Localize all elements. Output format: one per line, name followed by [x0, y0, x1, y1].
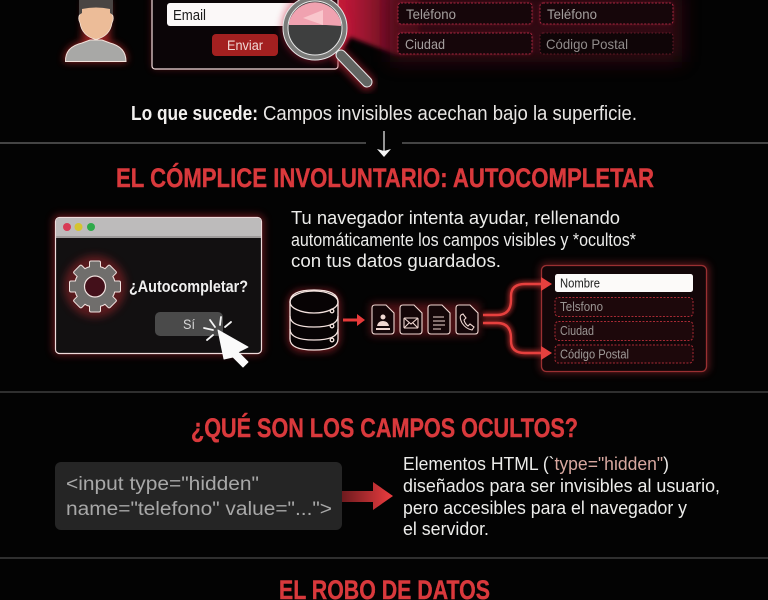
- text: autocomplete question: ¿Autocompletar?: [129, 277, 248, 296]
- hidden fields: Teléfono: [406, 6, 456, 22]
- panel: autocomplete browser window: Sí: [183, 316, 195, 332]
- hidden fields: Código Postal: [546, 36, 628, 52]
- panel: filled form: Telsfono: [560, 299, 603, 314]
- text: hidden fields explanation: pero accesibles para el navegador y: [403, 498, 687, 518]
- text: autocomplete explanation: automáticamente los campos visibles y *ocultos*: [291, 229, 636, 250]
- hidden fields: Teléfono: [547, 6, 597, 22]
- heading: hidden fields: ¿QUÉ SON LOS CAMPOS OCULTOS?: [191, 413, 578, 443]
- form window: Email: [173, 8, 206, 24]
- heading: autocomplete: EL CÓMPLICE INVOLUNTARIO: AUTOCOMPLETAR: [116, 163, 654, 193]
- panel: user and form with hidden fields: [64, 0, 682, 83]
- text: hidden fields explanation: el servidor.: [403, 519, 489, 539]
- text: autocomplete explanation: con tus datos guardados.: [291, 250, 501, 271]
- icon: magnifying glass: [282, 0, 367, 83]
- code block: name="telefono" value="...">: [66, 499, 332, 520]
- arrow: database to documents: [343, 314, 365, 326]
- text: hidden fields explanation: Elementos HTML (`type="hidden"): [403, 454, 669, 474]
- panel: filled form: Código Postal: [560, 346, 629, 362]
- title bar: [56, 218, 261, 236]
- text: what happens: Lo que sucede:: [131, 103, 258, 125]
- hidden fields: Ciudad: [405, 36, 445, 52]
- text: what happens description: Campos invisibles acechan bajo la superficie.: [263, 103, 637, 125]
- icon: user: [64, 0, 127, 62]
- text: autocomplete explanation: [291, 207, 636, 271]
- panel: filled form: Nombre: [560, 276, 600, 290]
- icon: documents: [370, 303, 480, 336]
- panel: filled form: [540, 263, 709, 373]
- code block: <input type="hidden": [66, 474, 259, 495]
- form window: [152, 0, 338, 69]
- arrows: documents to form fields: [483, 277, 552, 360]
- arrow: down: [377, 131, 391, 157]
- panel: filled form: Ciudad: [560, 323, 594, 338]
- text: hidden fields explanation: [403, 454, 720, 539]
- hidden fields: [390, 0, 682, 62]
- email input: [167, 3, 323, 26]
- button: yes: [155, 312, 223, 336]
- icon: database: [288, 290, 340, 352]
- arrow: code to explanation: [342, 482, 393, 510]
- text: hidden fields explanation: diseñados para ser invisibles al usuario,: [403, 476, 720, 496]
- form window: Enviar: [227, 38, 263, 53]
- text: autocomplete explanation: Tu navegador intenta ayudar, rellenando: [291, 207, 620, 228]
- red beam glow: [335, 0, 420, 56]
- diagram: data flow to form: [288, 263, 709, 373]
- icon: gear: [64, 256, 126, 318]
- code block: [55, 462, 342, 530]
- submit button: [212, 34, 278, 56]
- icon: cursor with click: [204, 317, 248, 367]
- panel: autocomplete browser window: [53, 215, 264, 367]
